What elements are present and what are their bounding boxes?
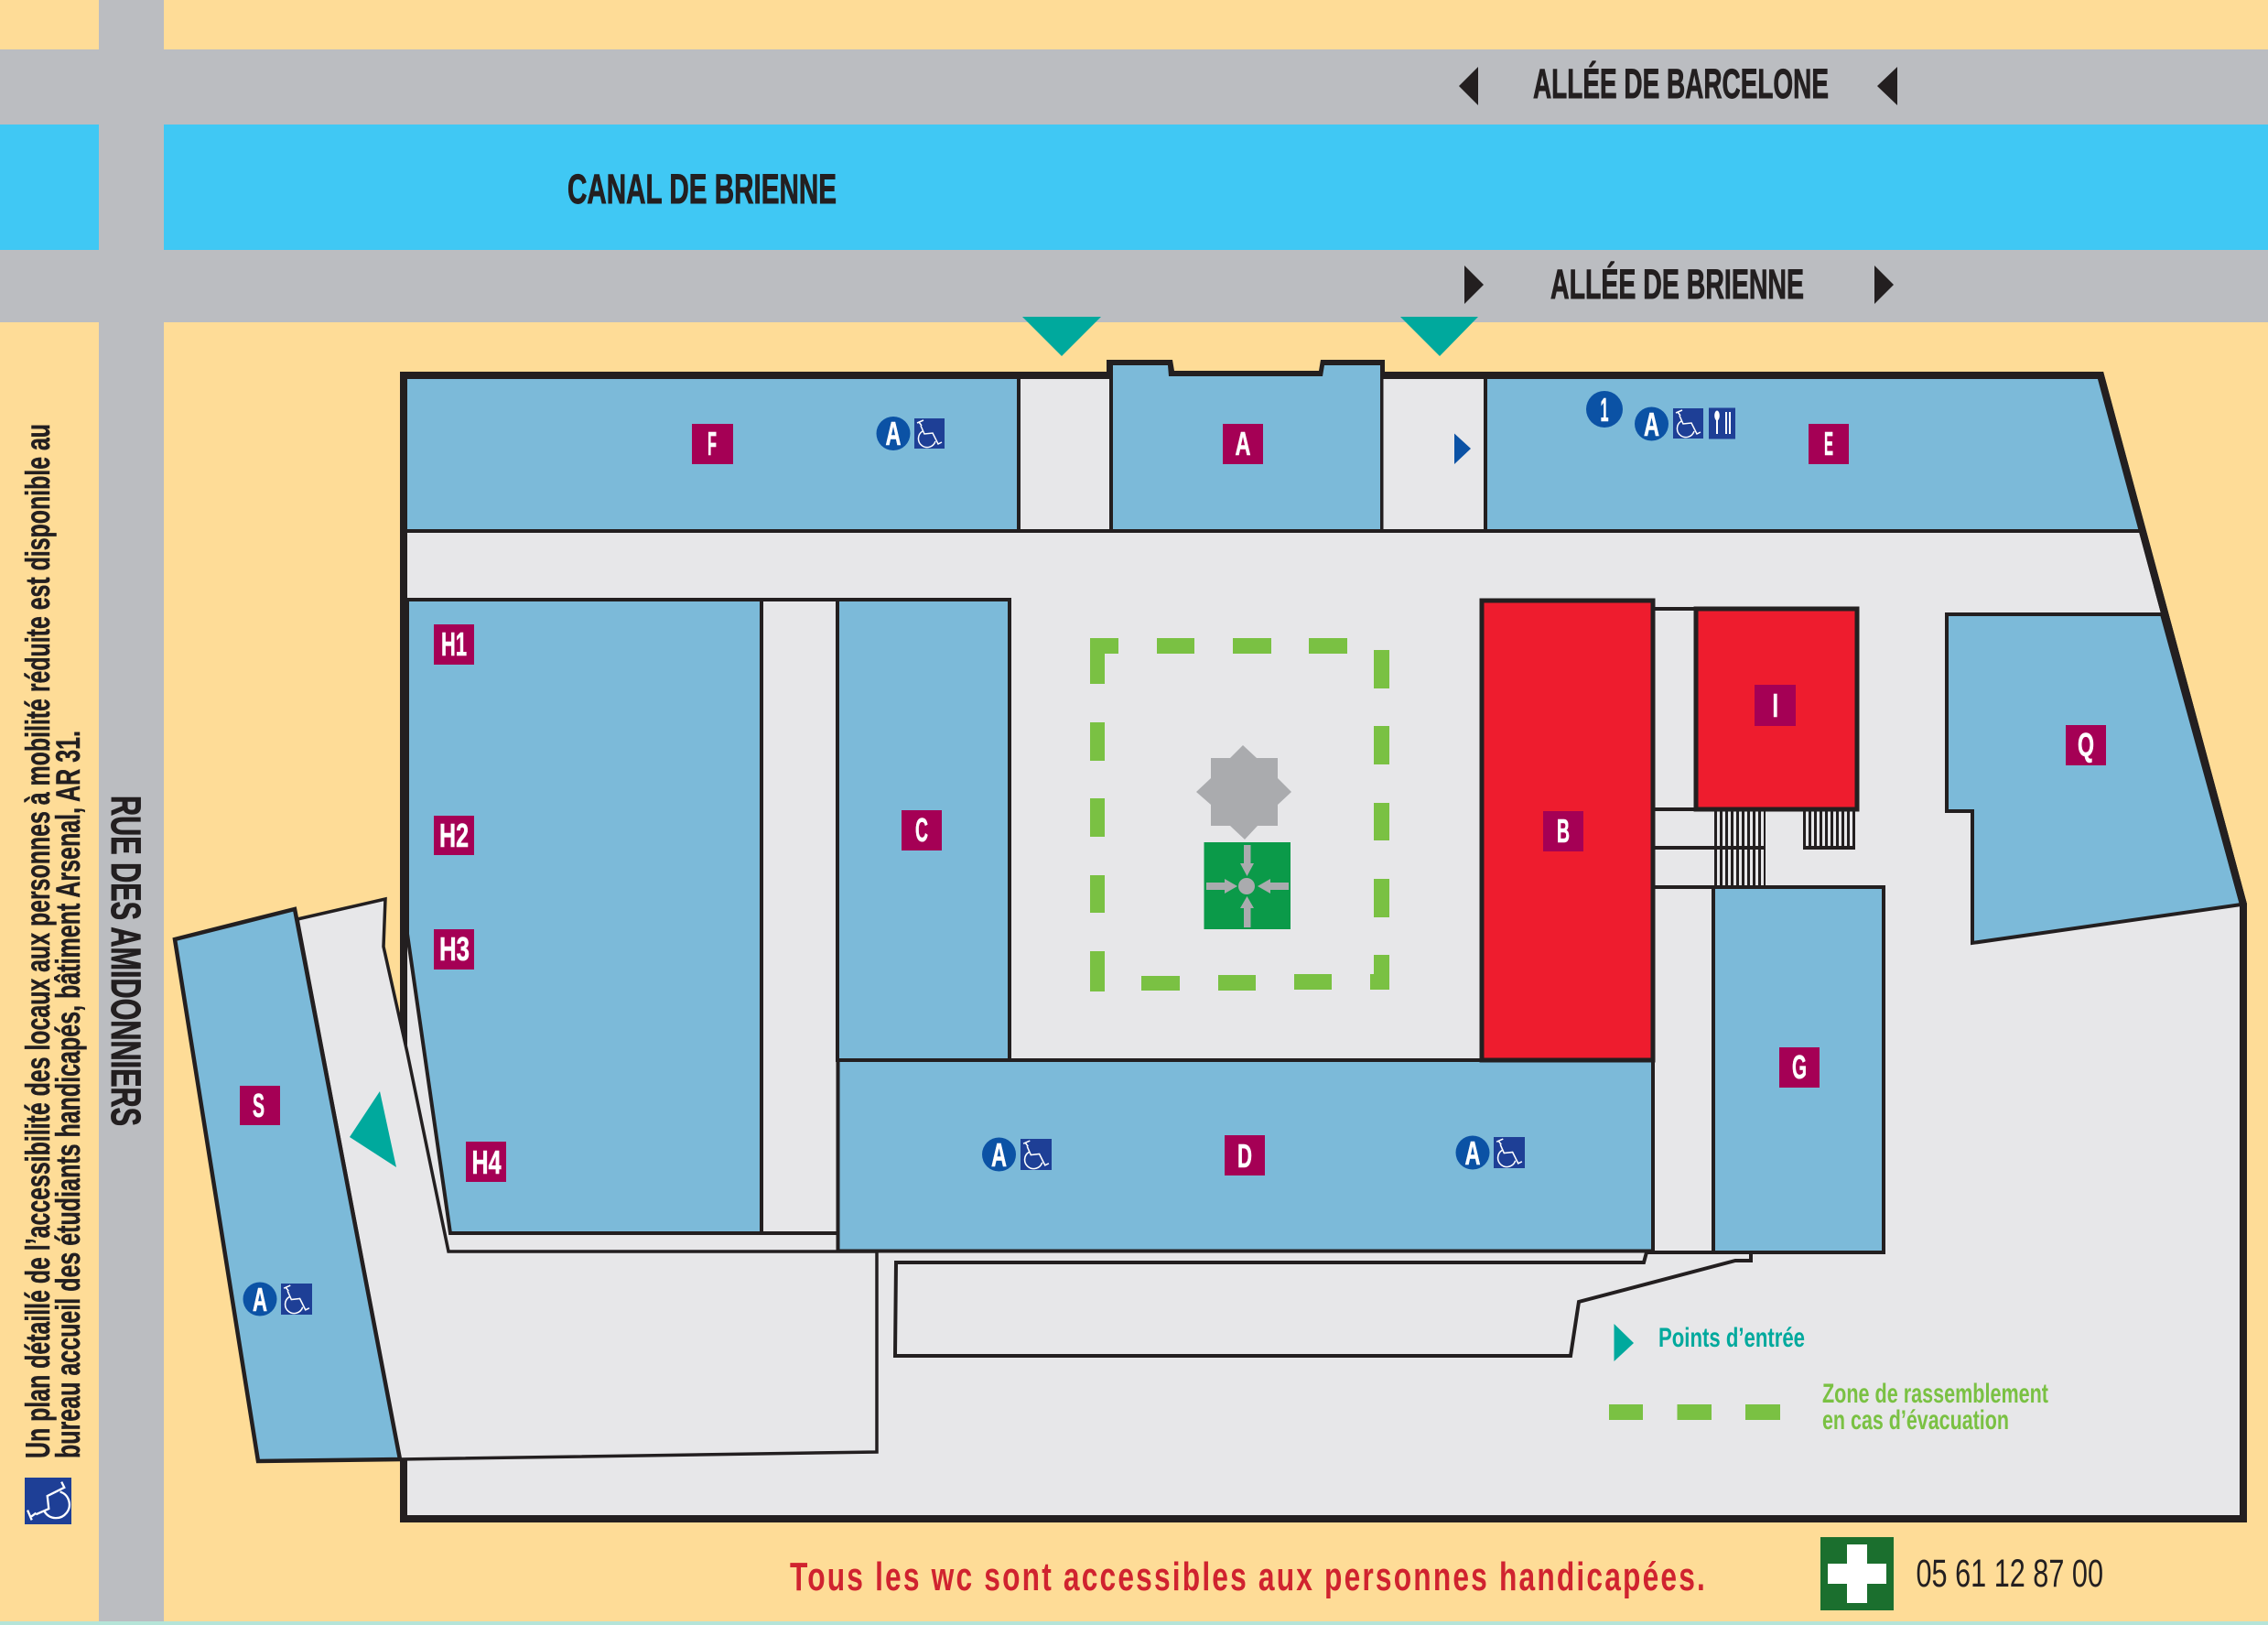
label I: I [1772,687,1778,724]
passage lines near I and G [1653,609,1766,1252]
legend: assembly zone: en cas d’évacuation [1822,1405,2009,1435]
accessible WC badge: A [886,415,901,452]
accessibility note [19,424,87,1524]
marker 1 [1586,391,1623,428]
accessible WC badge 2 [1455,1134,1525,1172]
note text: bureau accueil des étudiants handicapés, bâtiment Arsenal, AR 31. [49,731,87,1458]
accessible WC badge [877,415,945,452]
building G [1713,887,1884,1252]
canal name: CANAL DE BRIENNE [567,166,837,212]
road name: Allée de Brienne: ALLÉE DE BRIENNE [1550,261,1804,308]
label Q [2066,725,2106,765]
label C: C [915,811,928,849]
building B (red) [1482,601,1653,1060]
accessible WC badge: A [1644,406,1659,443]
label S [240,1086,280,1125]
entrance arrow: left [1022,317,1101,356]
building label F: F [707,425,717,462]
accessibility statement: Tous les wc sont accessibles aux personnes handicapées. [790,1555,1707,1599]
road: Allée de Brienne [0,250,2268,322]
building H [407,600,1010,1233]
left wall end along diagonal [400,1012,407,1053]
wall repair: lower-left [400,1459,407,1522]
accessible WC badge 2: A [1464,1134,1481,1172]
building E [1485,377,2142,531]
label S: S [253,1087,265,1124]
building label F [692,424,733,464]
building F [405,377,1019,531]
stairs: centre [1653,811,1766,885]
icon: first aid cross [1820,1537,1894,1610]
legend: entry points [1615,1323,1805,1361]
label I [1755,685,1796,726]
label H3: H3 [439,930,470,968]
assembly point sign [1204,842,1291,929]
direction arrow right 2 [1874,265,1894,304]
building label A [1223,424,1263,464]
label H4 [466,1142,506,1182]
accessible WC badge 1: A [991,1136,1007,1174]
label H2: H2 [439,817,469,854]
assembly zone dashed outline [1090,638,1389,991]
label G: G [1792,1048,1807,1086]
ground extension towards building S [297,899,877,1459]
bottom edge stripe [0,1621,2268,1625]
accessible WC badge [1635,406,1703,443]
label B [1543,811,1583,851]
icon: wheelchair rotated [25,1478,71,1524]
label D: D [1237,1137,1252,1175]
label D [1225,1135,1265,1175]
row lines between top buildings and passages [407,379,2142,533]
legend: entry points: Points d’entrée [1658,1323,1805,1353]
direction arrow right 1 [1464,265,1484,304]
building label E: E [1824,425,1833,462]
icon: restaurant [1709,408,1735,439]
entrance arrow: right [1400,317,1478,356]
accessible WC badge: A [253,1281,267,1318]
building Q [1947,586,2243,943]
star monument [1196,745,1291,840]
label B: B [1557,812,1570,850]
emergency phone number: 05 61 12 87 00 [1917,1552,2103,1596]
inner courtyard outline [895,1252,1751,1356]
road: Rue des Amidonniers [99,0,164,1621]
building I (red) [1696,609,1857,809]
redrawn site wall [404,375,2243,1519]
building S [175,909,400,1461]
accessible WC badge 1 [982,1136,1052,1174]
label H3 [434,929,474,970]
direction arrow left 1 [1459,67,1478,105]
marker 1: 1 [1600,391,1609,428]
entrance marker: small blue arrow [1454,434,1471,464]
road name: Rue des Amidonniers: RUE DES AMIDONNIERS [103,796,149,1126]
note text [19,424,87,1458]
building label A: A [1236,425,1250,462]
road: Allée de Barcelone [0,49,2268,125]
road name: Allée de Barcelone: ALLÉE DE BARCELONE [1533,60,1829,107]
direction arrow left 2 [1877,67,1897,105]
stairs: right [1803,829,1855,850]
canal [0,125,2268,250]
entrance arrow: S [350,1091,396,1167]
label H1 [434,624,474,665]
legend: assembly zone [1609,1379,2048,1435]
label C [902,810,942,850]
building C [837,600,1010,1060]
accessible WC badge [243,1281,312,1318]
legend: assembly zone: Zone de rassemblement [1822,1379,2048,1409]
label H4: H4 [472,1143,502,1181]
label G [1779,1047,1820,1088]
building D [838,1060,1653,1251]
label H1: H1 [441,625,467,663]
building A [1107,360,1385,533]
label Q: Q [2078,726,2094,764]
site ground [404,375,2243,1519]
building label E [1809,424,1849,464]
